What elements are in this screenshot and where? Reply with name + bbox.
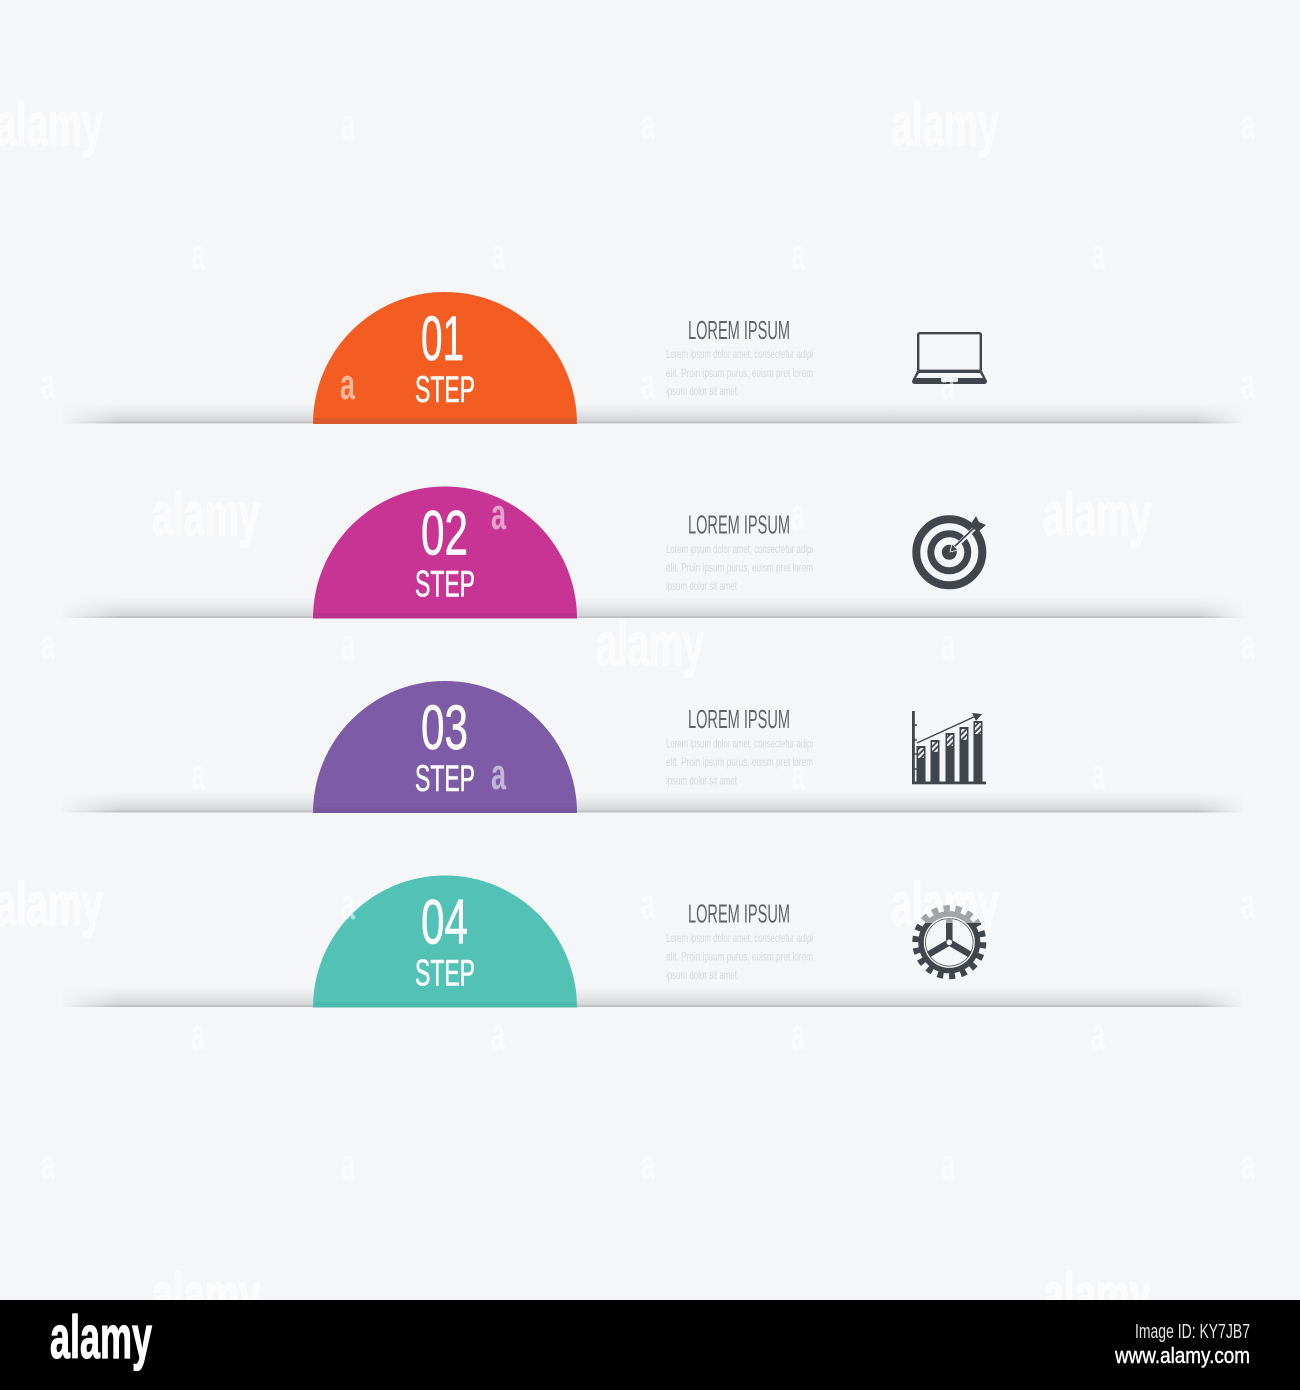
watermark: repeated stock logos: a (341, 100, 355, 149)
watermark: repeated stock logos: a (1241, 100, 1255, 149)
watermark: repeated stock logos: a (191, 750, 205, 799)
step row 1: laptop (60, 292, 1245, 424)
watermark: repeated stock logos: alamy (596, 611, 704, 678)
text block 3 (666, 704, 813, 788)
watermark: repeated stock logos: a (41, 1140, 55, 1189)
text block 4: Lorem ipsum dolor amet, consectetur adipi (666, 931, 813, 945)
semicircle badge 02: STEP (415, 564, 475, 604)
watermark: repeated stock logos: a (641, 1140, 655, 1189)
watermark: repeated stock logos: a (941, 620, 955, 669)
watermark: repeated stock logos: a (191, 230, 205, 279)
watermark: repeated stock logos: a (1241, 620, 1255, 669)
watermark: repeated stock logos: a (1241, 880, 1255, 929)
semicircle badge 03: STEP (415, 758, 475, 799)
step row 3: chart (60, 681, 1245, 813)
watermark: repeated stock logos: a (641, 880, 655, 929)
text block 1: LOREM IPSUM (688, 315, 790, 345)
semicircle badge 03 (313, 681, 577, 813)
watermark over gear, beneath icon: alamy (891, 871, 999, 938)
shelf shadow 2 (68, 604, 1238, 618)
semicircle badge 02: 02 (421, 498, 468, 568)
watermark: repeated stock logos: alamy (152, 481, 260, 548)
text block 2: ipsum dolor sit amet (666, 579, 737, 593)
watermark: repeated stock logos: a (641, 360, 655, 409)
step row 4: gear (60, 871, 1245, 1008)
watermark: repeated stock logos: a (941, 360, 955, 409)
watermark: repeated stock logos: alamy (152, 1261, 260, 1328)
text block 2 (666, 510, 813, 593)
watermark: repeated stock logos: a (491, 1010, 505, 1059)
text block 4 (666, 898, 813, 982)
footer bar (0, 1300, 1300, 1390)
text block 3: elit. Proin ipsum purus, euism pret lorem (666, 755, 813, 769)
icon: target with arrow (916, 516, 986, 585)
semicircle badge 01: STEP (415, 369, 475, 410)
semicircle badge 01: 01 (421, 304, 464, 374)
watermark: repeated stock logos: a (491, 750, 506, 799)
watermark: repeated stock logos: alamy (1043, 1261, 1151, 1328)
watermark: repeated stock logos: a (791, 750, 805, 799)
watermark: repeated stock logos: a (1241, 360, 1255, 409)
footer logo: alamy (50, 1304, 152, 1371)
semicircle badge 01 (313, 292, 577, 424)
watermark: repeated stock logos: a (341, 1140, 355, 1189)
watermark: repeated stock logos: alamy (0, 91, 103, 158)
text block 3: Lorem ipsum dolor amet, consectetur adipi (666, 736, 813, 750)
watermark: repeated stock logos: a (791, 490, 805, 539)
shelf shadow 1 (68, 408, 1238, 424)
watermark: repeated stock logos: a (340, 360, 355, 409)
step row 2: target (60, 486, 1245, 618)
text block 2: LOREM IPSUM (688, 510, 790, 540)
shelf shadow 3 (68, 798, 1238, 812)
text block 3: ipsum dolor sit amet (666, 774, 737, 788)
semicircle badge 04: 04 (421, 888, 468, 958)
watermark: repeated stock logos: a (1091, 230, 1105, 279)
text block 1: elit. Proin ipsum purus, euism pret lorem (666, 366, 813, 380)
watermark: repeated stock logos: a (641, 100, 655, 149)
text block 3: LOREM IPSUM (688, 704, 790, 734)
watermark: repeated stock logos: alamy (1043, 481, 1151, 548)
watermark: repeated stock logos: alamy (0, 871, 103, 938)
footer image id: Image ID: KY7JB7 (1135, 1321, 1250, 1343)
text block 4: LOREM IPSUM (688, 898, 790, 928)
watermark: repeated stock logos: a (1241, 1140, 1255, 1189)
text block 1 (666, 315, 813, 398)
watermark: repeated stock logos: a (941, 1140, 955, 1189)
watermark: repeated stock logos: a (491, 490, 506, 539)
watermark: repeated stock logos: a (1091, 1010, 1105, 1059)
watermark: repeated stock logos: a (791, 230, 805, 279)
watermark: repeated stock logos: a (41, 620, 55, 669)
text block 1: ipsum dolor sit amet (666, 384, 737, 398)
icon: laptop (912, 333, 987, 384)
semicircle badge 04 (313, 876, 577, 1008)
watermark: repeated stock logos: a (191, 1010, 205, 1059)
watermark: repeated stock logos: alamy (891, 91, 999, 158)
text block 2: elit. Proin ipsum purus, euism pret lorem (666, 560, 813, 574)
watermark: repeated stock logos: a (341, 880, 355, 929)
semicircle badge 04: STEP (415, 952, 475, 994)
text block 4: elit. Proin ipsum purus, euism pret lorem (666, 950, 813, 964)
text block 2: Lorem ipsum dolor amet, consectetur adipi (666, 542, 813, 556)
watermark: repeated stock logos: a (491, 230, 505, 279)
text block 1: Lorem ipsum dolor amet, consectetur adipi (666, 347, 813, 361)
watermark: repeated stock logos: a (341, 620, 355, 669)
watermark: repeated stock logos: a (791, 1010, 805, 1059)
shelf shadow 4 (68, 992, 1238, 1007)
footer url: www.alamy.com (1114, 1343, 1250, 1368)
icon: gear (916, 909, 983, 976)
watermark: repeated stock logos: a (1091, 750, 1105, 799)
icon: bar chart with rising arrow (912, 711, 986, 784)
text block 4: ipsum dolor sit amet (666, 968, 737, 982)
watermark: repeated stock logos: a (41, 360, 55, 409)
semicircle badge 02 (313, 486, 577, 618)
semicircle badge 03: 03 (421, 693, 468, 763)
